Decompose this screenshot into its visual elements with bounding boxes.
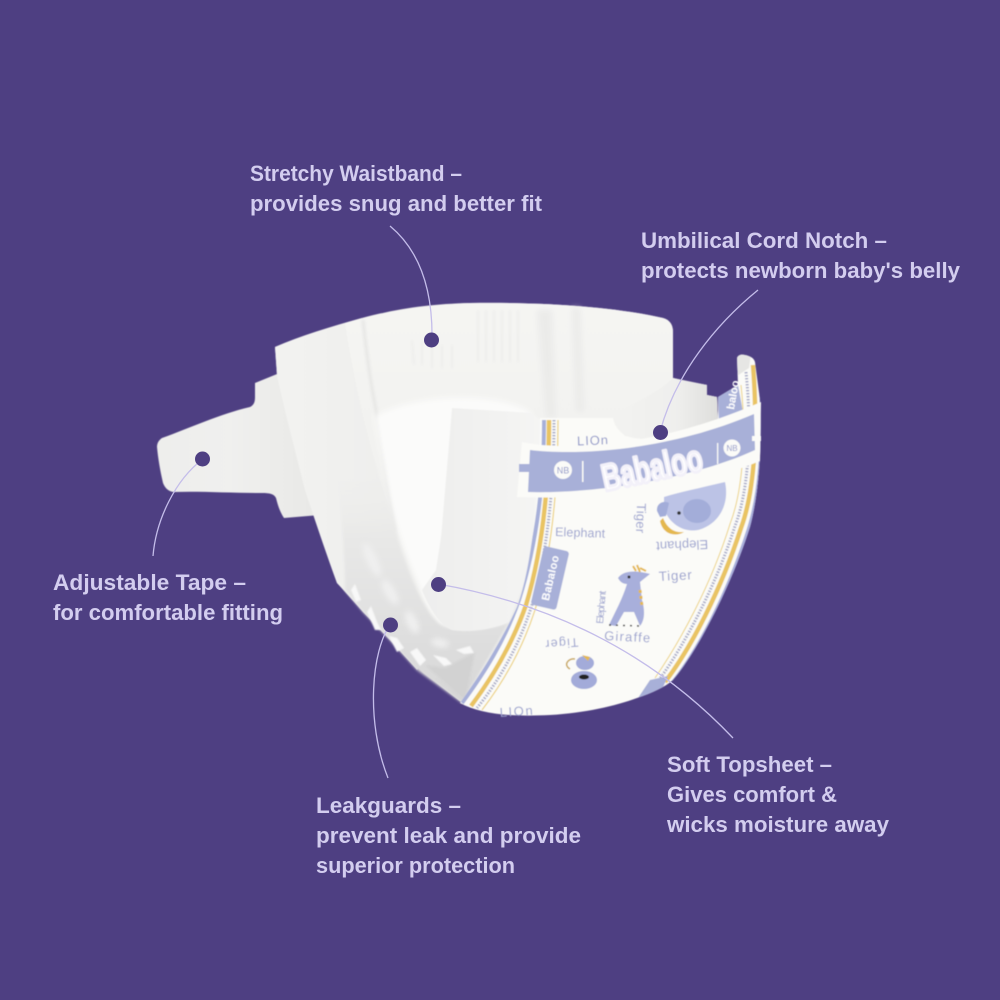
- lower shadow creases: [425, 652, 475, 700]
- dot: waistband: [424, 332, 439, 348]
- absorbent core highlight: [375, 398, 535, 632]
- callout: stretchy waistband: provides snug and better fit: [250, 191, 542, 216]
- front wall grey tip: [737, 355, 750, 375]
- right blue fringe: [672, 399, 760, 681]
- Lion bottom label: LIOn: [499, 703, 533, 720]
- icon: elephant: [657, 482, 726, 534]
- panel fold line: [363, 320, 396, 530]
- callout: soft topsheet: Soft Topsheet –: [667, 752, 832, 777]
- icon: tiger: [567, 655, 597, 689]
- top right strip text: baloo: [725, 379, 742, 411]
- front panel paper: [460, 354, 762, 716]
- notch grey cover: [613, 378, 718, 439]
- callout: umbilical cord notch: Umbilical Cord Notch –: [641, 228, 887, 253]
- diaper illustration: [157, 303, 770, 730]
- waistband pleats: [412, 310, 518, 368]
- side Babaloo tag: Babaloo: [540, 554, 562, 602]
- line: tape: [153, 459, 203, 556]
- leader lines: [153, 226, 758, 778]
- dot: topsheet: [431, 577, 446, 592]
- back vertical folds: [537, 308, 584, 418]
- left dotted stripe: [477, 420, 554, 708]
- printed front panel: [460, 354, 762, 716]
- Tiger right label: Tiger: [658, 567, 693, 584]
- dot: umbilical: [653, 425, 668, 440]
- line: waistband: [390, 226, 432, 340]
- diaper base silhouette: [275, 303, 718, 703]
- callout: adjustable tape: Adjustable Tape –: [53, 570, 246, 595]
- Giraffe label: Giraffe: [604, 628, 651, 645]
- Tiger vertical label: Tiger: [633, 503, 649, 534]
- label tick marks: [519, 464, 530, 472]
- label divider: [582, 461, 584, 482]
- side Babaloo tag: [531, 546, 569, 610]
- dot: leakguard: [383, 618, 398, 632]
- callout: leakguards: superior protection: [316, 853, 515, 878]
- line: topsheet: [438, 584, 733, 738]
- left blue stripe: [462, 420, 544, 703]
- line: leakguard: [373, 625, 390, 778]
- Elephant upside-down label: Elephant: [656, 537, 708, 554]
- ruffled leak guard edge: [351, 584, 474, 666]
- Tiger upside-down label: Tiger: [545, 635, 579, 651]
- right yellow stripe: [665, 365, 755, 682]
- callout: umbilical cord notch: protects newborn baby's belly: [641, 258, 960, 283]
- callout: leakguards: Leakguards –: [316, 793, 461, 818]
- corner tag: [638, 676, 668, 698]
- top Lion print: LIOn: [577, 432, 608, 448]
- callout: stretchy waistband: Stretchy Waistband –: [250, 161, 462, 186]
- NB badge left: NB: [557, 466, 569, 476]
- right dotted stripe: [659, 372, 749, 680]
- right label divider: [717, 443, 718, 464]
- label blue strip: [528, 414, 755, 492]
- waistband side panel: [275, 318, 440, 670]
- dot: tape: [195, 452, 210, 466]
- Elephant vertical label: Elephant: [595, 590, 609, 624]
- Babaloo logo text: Babaloo: [598, 438, 706, 500]
- NB badge right: [724, 440, 740, 456]
- animal print labels: [499, 503, 708, 720]
- leakguard creases: [360, 542, 450, 649]
- left yellow stripe: [471, 420, 549, 706]
- adjustable tape tab: [157, 372, 320, 518]
- callout: soft topsheet: wicks moisture away: [666, 812, 889, 837]
- Babaloo waist label band: [517, 402, 761, 498]
- soft topsheet front flap: [422, 408, 545, 631]
- icon: giraffe: [609, 565, 650, 626]
- back inner panel: [345, 303, 718, 640]
- leakguard gathered band: [335, 470, 528, 703]
- callout dots: [195, 332, 668, 632]
- callout: adjustable tape: for comfortable fitting: [53, 600, 283, 625]
- callout: soft topsheet: Gives comfort &: [667, 782, 837, 807]
- Elephant label: Elephant: [555, 525, 606, 541]
- NB badge right: NB: [726, 444, 738, 453]
- callout: leakguards: prevent leak and provide: [316, 823, 581, 848]
- line: umbilical: [660, 290, 758, 432]
- top right Babaloo strip: [718, 385, 743, 423]
- NB badge left: [554, 461, 572, 479]
